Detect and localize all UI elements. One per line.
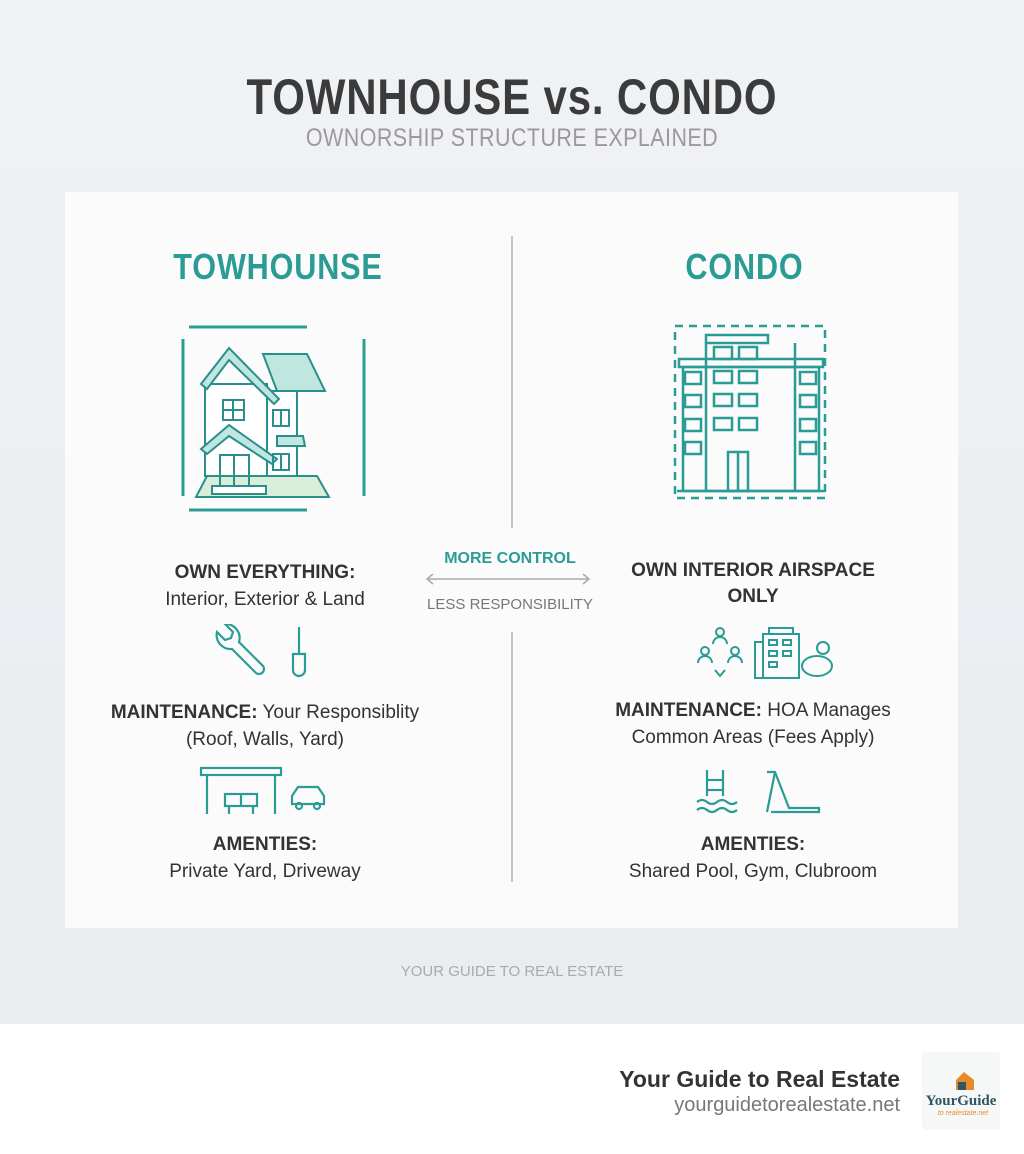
heading: townhouse: TOWHOUNSE — [173, 246, 383, 287]
subtitle: OWNORSHIP STRUCTURE EXPLAINED — [306, 124, 718, 152]
text: amenities condo: Shared Pool, Gym, Clubroom — [629, 861, 877, 882]
text: amenities townhouse: AMENTIES: — [213, 834, 317, 855]
text: own everything: Interior, Exterior & Land — [165, 589, 365, 610]
panel: comparison — [65, 192, 958, 928]
text: amenities townhouse — [169, 834, 361, 882]
icon: townhouse — [182, 326, 366, 512]
text: maintenance townhouse — [111, 702, 419, 750]
center comparison arrow: LESS RESPONSIBILITY — [427, 596, 593, 613]
logo: YourGuide — [926, 1093, 997, 1109]
center comparison arrow — [426, 550, 593, 613]
text: own interior airspace: OWN INTERIOR AIRSPACE — [631, 560, 875, 581]
icons: pool and treadmill — [696, 770, 820, 814]
text: own everything: OWN EVERYTHING: — [175, 562, 355, 583]
text: maintenance townhouse: MAINTENANCE: Your Responsiblity — [111, 702, 419, 723]
center comparison arrow: MORE CONTROL — [444, 550, 576, 567]
text: own interior airspace — [631, 560, 875, 607]
text: amenities townhouse: Private Yard, Driveway — [169, 861, 361, 882]
footer bar — [0, 1024, 1024, 1154]
icon: condo building — [674, 324, 826, 500]
footer brand text: yourguidetorealestate.net — [674, 1094, 900, 1116]
logo: to realestate.net — [938, 1110, 989, 1117]
text: own everything — [165, 562, 365, 610]
text: amenities condo — [629, 834, 877, 882]
text: maintenance condo: Common Areas (Fees Apply) — [632, 727, 874, 748]
text: own interior airspace: ONLY — [727, 586, 779, 607]
footer caption: YOUR GUIDE TO REAL ESTATE — [401, 963, 623, 980]
heading: condo: CONDO — [685, 246, 804, 287]
footer brand text: Your Guide to Real Estate — [619, 1066, 900, 1092]
icons: wrench and shovel — [216, 624, 306, 678]
icons: carport and car — [200, 766, 326, 814]
text: maintenance condo — [615, 700, 891, 748]
icons: community, building, piggy bank — [697, 627, 833, 679]
footer brand text — [619, 1066, 900, 1116]
logo — [922, 1052, 1000, 1130]
text: maintenance townhouse: (Roof, Walls, Yard) — [186, 729, 344, 750]
title: TOWNHOUSE vs. CONDO — [247, 69, 777, 125]
text: maintenance condo: MAINTENANCE: HOA Manages — [615, 700, 891, 721]
text: amenities condo: AMENTIES: — [701, 834, 805, 855]
